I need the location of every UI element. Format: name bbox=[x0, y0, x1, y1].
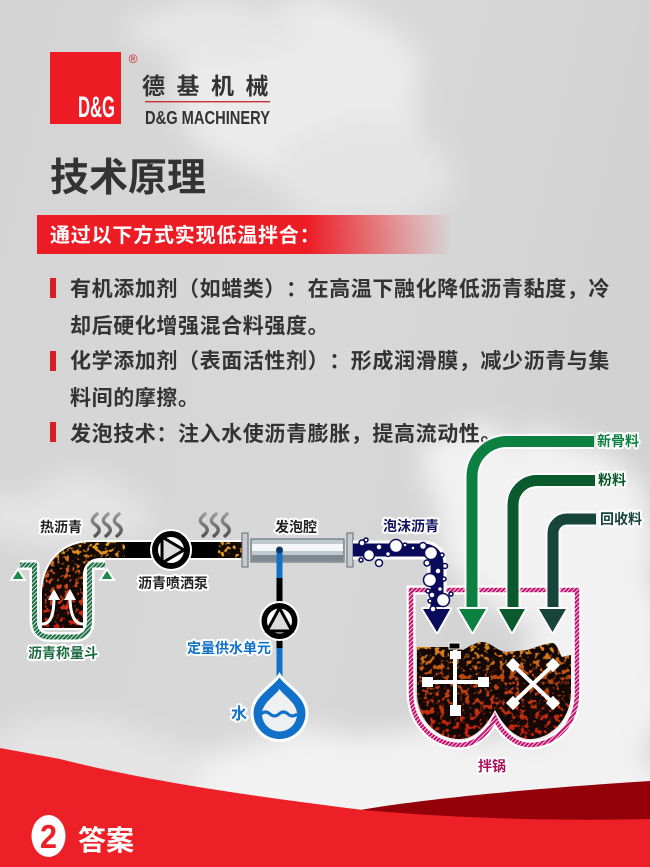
label: foamed asphalt: 泡沫沥青 bbox=[383, 518, 439, 534]
cylinder highlight bbox=[252, 544, 343, 551]
logo bbox=[50, 52, 280, 128]
halo bbox=[513, 480, 595, 612]
mixer wall bbox=[411, 590, 577, 745]
drop outer bbox=[252, 675, 307, 740]
foam pipe bbox=[353, 550, 437, 612]
pump body bbox=[151, 530, 191, 570]
shaft bbox=[553, 519, 596, 612]
company name English: D&G MACHINERY bbox=[145, 108, 270, 128]
head bbox=[499, 609, 525, 632]
process diagram bbox=[11, 433, 642, 774]
rising arrow left bbox=[42, 596, 54, 624]
steam right bbox=[200, 514, 229, 536]
halo bbox=[553, 519, 596, 612]
hopper halo bbox=[20, 565, 105, 637]
nozzle bbox=[276, 546, 283, 554]
water drop bbox=[252, 675, 307, 740]
item 2 text: 化学添加剂（表面活性剂）：形成润滑膜，减少沥青与集 bbox=[70, 349, 610, 373]
mixture base bbox=[415, 640, 575, 743]
right support triangle bbox=[100, 569, 114, 580]
number: 2 bbox=[40, 818, 57, 855]
foaming chamber bbox=[242, 533, 353, 567]
hopper bbox=[11, 565, 114, 637]
pipe aggregate speckle bbox=[218, 542, 242, 558]
water pump triangle bbox=[267, 608, 292, 631]
label: hot asphalt: 热沥青 bbox=[40, 519, 82, 535]
mixer bbox=[411, 590, 577, 745]
item 1 text: 有机添加剂（如蜡类）：在高温下融化降低沥青黏度，冷 bbox=[70, 277, 610, 301]
item 3 text: 发泡技术：注入水使沥青膨胀，提高流动性。 bbox=[70, 422, 502, 446]
label: water: 水 bbox=[231, 705, 247, 723]
black pipe bbox=[118, 542, 242, 558]
shaft bbox=[513, 480, 595, 612]
elbow aggregate bbox=[42, 540, 127, 630]
steam left bbox=[92, 514, 121, 536]
bullet 1 bbox=[50, 278, 56, 298]
water line bbox=[252, 546, 307, 740]
bubbles bbox=[359, 538, 453, 612]
asphalt pump bbox=[151, 530, 191, 570]
arrow: new aggregate bbox=[459, 442, 594, 632]
paddle tip bbox=[449, 643, 460, 649]
blue upper pipe bbox=[276, 551, 282, 578]
black pipe bbox=[276, 578, 282, 650]
upper right block bbox=[546, 658, 560, 672]
subtitle banner bbox=[37, 215, 452, 254]
number badge bbox=[32, 815, 66, 857]
logo mark letters: D&G bbox=[78, 91, 115, 124]
banner text: 通过以下方式实现低温拌合： bbox=[50, 223, 320, 247]
label: asphalt pump: 沥青喷洒泵 bbox=[138, 575, 208, 591]
water pump body bbox=[260, 602, 298, 640]
wave bbox=[261, 712, 297, 716]
X shafts bbox=[513, 665, 553, 703]
arrow: powder bbox=[499, 480, 595, 632]
label: mixer pot: 拌锅 bbox=[478, 758, 506, 774]
label: hopper: 沥青称量斗 bbox=[28, 645, 98, 661]
left flange bbox=[242, 533, 248, 567]
head bbox=[539, 609, 566, 632]
pump inner circle bbox=[158, 537, 184, 563]
title: 技术原理 bbox=[50, 157, 206, 200]
label: recycled: 回收料 bbox=[600, 511, 642, 527]
footer label: 答案 bbox=[78, 825, 134, 856]
drop inner bbox=[262, 689, 297, 731]
arrow: recycled material bbox=[539, 519, 596, 632]
hopper wall bbox=[20, 565, 105, 637]
footer red shape bbox=[0, 748, 650, 867]
footer dark red wave bbox=[360, 781, 650, 825]
logo rule bbox=[145, 101, 270, 102]
foam pipe halo bbox=[353, 550, 437, 612]
upper block bbox=[450, 651, 461, 659]
right paddle bbox=[506, 658, 560, 710]
upper left block bbox=[506, 658, 520, 672]
left block bbox=[422, 677, 433, 687]
water pump bbox=[260, 602, 298, 640]
company name Chinese: 德基机械 bbox=[142, 73, 280, 99]
mixer halo bbox=[411, 590, 577, 745]
elbow base bbox=[42, 542, 125, 628]
item 1 text line 2: 却后硬化增强混合料强度。 bbox=[70, 315, 329, 338]
bullet 2 bbox=[50, 351, 56, 371]
item 2 text line 2: 料间的摩擦。 bbox=[70, 387, 200, 410]
horizontal shaft bbox=[425, 680, 485, 684]
cylinder shadow bbox=[252, 555, 343, 561]
label: foaming chamber: 发泡腔 bbox=[275, 519, 317, 535]
right block bbox=[478, 677, 489, 687]
footer bbox=[0, 748, 650, 867]
lower block bbox=[450, 705, 461, 716]
foamed asphalt pipe bbox=[353, 538, 453, 632]
vertical shaft bbox=[453, 650, 457, 710]
lower right block bbox=[546, 696, 560, 710]
right flange bbox=[347, 533, 353, 567]
left support triangle bbox=[11, 569, 25, 580]
foam arrow head bbox=[423, 609, 450, 632]
mixture bbox=[415, 640, 575, 743]
elbow halo bbox=[42, 542, 125, 628]
registered mark: ® bbox=[129, 52, 138, 66]
arrow head right bbox=[64, 589, 76, 600]
left paddle bbox=[422, 643, 489, 716]
bullet 3 bbox=[50, 422, 56, 442]
rising arrow right bbox=[70, 596, 83, 624]
shaft bbox=[472, 442, 594, 612]
mixture aggregate bbox=[415, 640, 575, 743]
water pump inner bbox=[267, 608, 292, 634]
head bbox=[459, 609, 486, 632]
label: new aggregate: 新骨料 bbox=[597, 433, 639, 449]
list of methods bbox=[50, 277, 610, 446]
pipe top halo bbox=[125, 540, 242, 560]
label: water metering unit: 定量供水单元 bbox=[187, 640, 271, 656]
pump triangle bbox=[162, 537, 184, 563]
banner bar bbox=[37, 215, 452, 254]
hot asphalt pipe bbox=[42, 540, 242, 630]
logo mark: red square bbox=[50, 52, 121, 124]
label: powder: 粉料 bbox=[598, 472, 626, 488]
halo bbox=[472, 442, 594, 612]
labels bbox=[28, 433, 642, 774]
chamber cylinder bbox=[251, 539, 344, 562]
arrow head left bbox=[48, 589, 60, 600]
pipe aggregate near chamber bbox=[218, 542, 242, 558]
lower left block bbox=[506, 696, 520, 710]
blue lower pipe bbox=[276, 648, 282, 680]
